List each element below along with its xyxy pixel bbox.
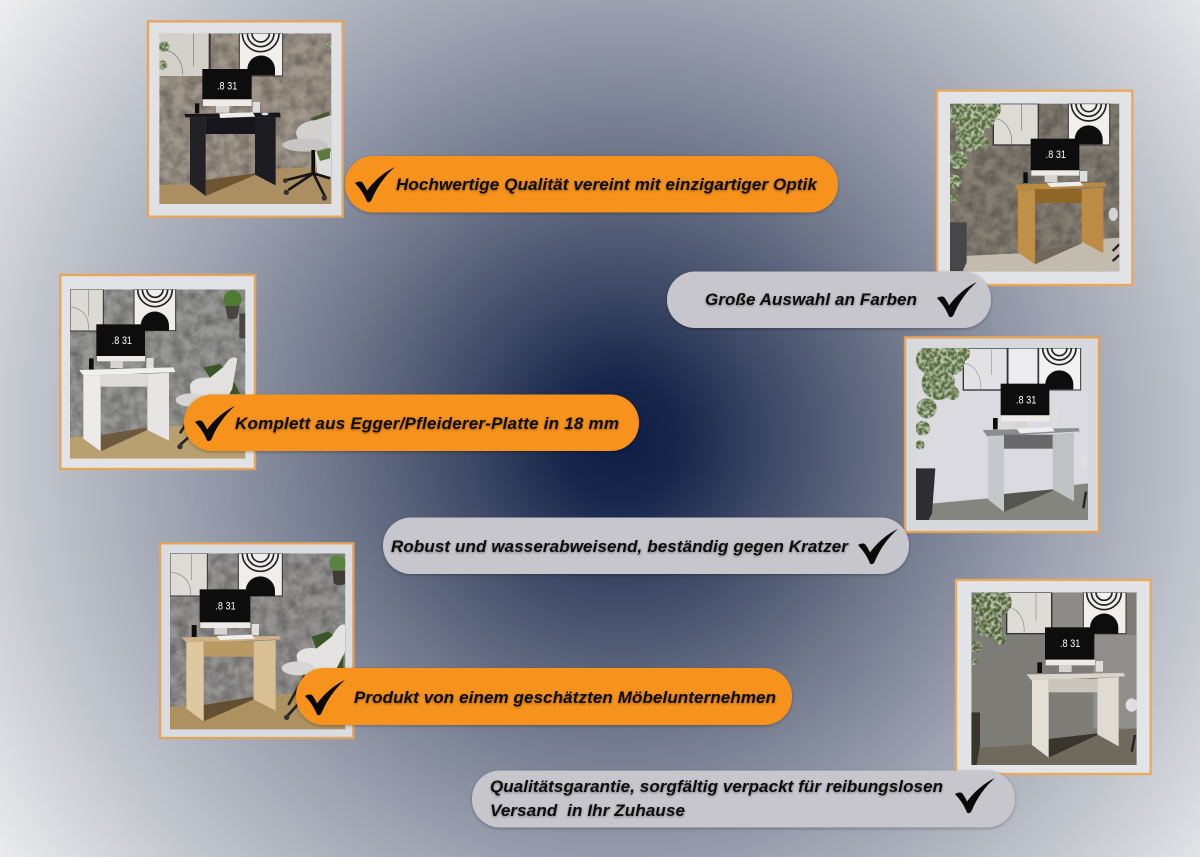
text: guarantee: Qualitätsgarantie, sorgfältig verpackt für reibungslosen bbox=[490, 777, 943, 796]
panel: oak desk photo bbox=[937, 86, 1132, 285]
panel: sonoma desk photo: .8 31 bbox=[215, 600, 236, 612]
icon: check mark bbox=[305, 680, 345, 715]
callout: company bbox=[296, 668, 792, 725]
panel: grey desk photo bbox=[905, 331, 1099, 532]
text: material: Komplett aus Egger/Pfleiderer-Platte in 18 mm bbox=[235, 414, 619, 433]
icon: check mark bbox=[937, 282, 977, 317]
text: quality: Hochwertige Qualität vereint mit einzigartiger Optik bbox=[396, 175, 819, 194]
panel: white desk photo bbox=[60, 272, 255, 469]
text: robust: Robust und wasserabweisend, beständig gegen Kratzer bbox=[391, 537, 849, 556]
text: company: Produkt von einem geschätzten Möbelunternehmen bbox=[354, 688, 776, 707]
panel: white desk photo: .8 31 bbox=[112, 335, 132, 347]
panel: grey desk photo: .8 31 bbox=[1016, 394, 1036, 406]
panel: black desk photo bbox=[148, 15, 343, 217]
callout: quality bbox=[345, 156, 838, 212]
icon: check mark bbox=[195, 406, 235, 441]
panel: oak desk photo: .8 31 bbox=[1046, 149, 1066, 161]
icon: check mark bbox=[858, 529, 898, 564]
icon: check mark bbox=[955, 778, 995, 813]
text: colours: Große Auswahl an Farben bbox=[705, 290, 917, 309]
panel: light desk photo: .8 31 bbox=[1060, 638, 1080, 650]
panel: sonoma desk photo bbox=[160, 535, 353, 738]
text: guarantee: Versand in Ihr Zuhause bbox=[490, 801, 685, 820]
callout: robust bbox=[383, 518, 909, 574]
callout: guarantee bbox=[472, 770, 1015, 828]
panel: light desk photo bbox=[956, 575, 1151, 774]
panel: black desk photo: .8 31 bbox=[217, 80, 237, 92]
text: guarantee bbox=[490, 777, 943, 820]
icon: check mark bbox=[355, 167, 395, 202]
callout: colours bbox=[667, 272, 991, 328]
callout: material bbox=[184, 394, 639, 451]
